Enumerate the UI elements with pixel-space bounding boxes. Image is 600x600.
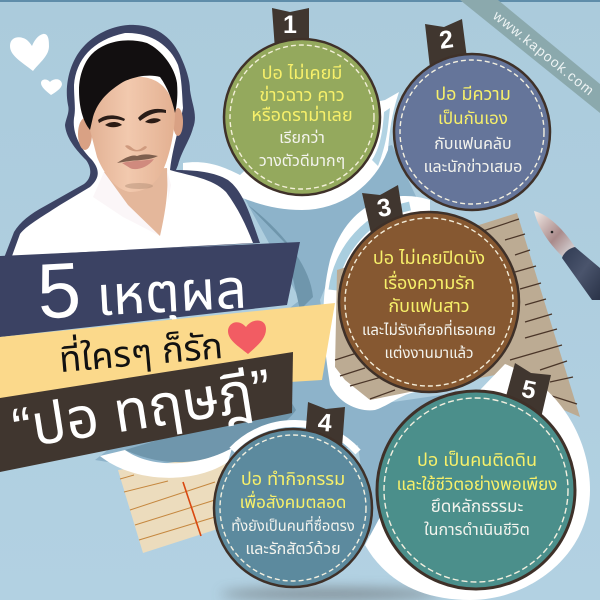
light gap beside circle 1 [372, 108, 390, 166]
tag 1: 1 [283, 11, 297, 39]
tag 5: 5 [519, 375, 539, 405]
circle 1: วางตัวดีมากๆ [259, 153, 345, 170]
circle 5: ปอ เป็นคนติดดิน [417, 450, 537, 470]
chin stubble [125, 183, 153, 189]
icon: red heart [228, 320, 266, 354]
circle 4: ทั้งยังเป็นคนที่ซื่อตรง [231, 516, 355, 535]
banner: yellow [0, 303, 335, 400]
icon: fountain pen [534, 211, 600, 300]
brows [98, 109, 166, 123]
banner: 5 reasons: 5 เหตุผล [35, 237, 249, 335]
circle 3: ปอ ไม่เคยปิดบัง [373, 248, 485, 268]
ground shadow [220, 588, 440, 600]
navy outline [4, 25, 260, 258]
circle 5 [377, 391, 575, 589]
circle 3: แต่งงานมาแล้ว [385, 344, 473, 362]
tag 1 [272, 8, 309, 50]
tag 3: 3 [375, 193, 393, 223]
heart: large [10, 34, 49, 71]
white ring around circle 5 [365, 364, 590, 600]
circle 2: และนักข่าวเสมอ [424, 158, 522, 176]
eyes [105, 118, 161, 127]
circle 1: ข่าวฉาว คาว [259, 85, 345, 105]
lips [122, 159, 154, 169]
light gap inside circle 3 ring [333, 206, 410, 290]
circle 3: และไม่รังเกียจที่เธอเคย [362, 319, 496, 339]
ears [78, 118, 92, 150]
banner: name: “ปอ ทฤษฎี” [8, 357, 276, 461]
circle 2: ปอ มีความ [435, 84, 511, 104]
white ring around circle 4 [232, 424, 358, 452]
circle 5: ยึดหลักธรรมะ [431, 497, 523, 516]
heart: small [41, 79, 62, 95]
tag 3 [362, 185, 404, 238]
circle 5: ในการดำเนินชีวิต [424, 522, 530, 539]
ribbon: website [460, 0, 600, 113]
tag 4 [305, 402, 345, 448]
circle 4: และรักสัตว์ด้วย [245, 541, 341, 558]
portrait [4, 25, 260, 258]
moustache [117, 154, 158, 163]
banner: yellow: ที่ใครๆ ก็รัก [57, 321, 224, 380]
circle 1: ปอ ไม่เคยมี [262, 63, 342, 83]
circle 5: และใช้ชีวิตอย่างพอเพียง [397, 474, 557, 494]
tag 5 [505, 363, 551, 418]
circle 3 [339, 212, 519, 392]
tag 2: 2 [437, 25, 455, 55]
circle 4: เพื่อสังคมตลอด [240, 490, 346, 512]
hair [79, 40, 177, 130]
darker band under name banner [125, 400, 296, 462]
nose shadow [125, 145, 147, 151]
circle 4: ปอ ทำกิจกรรม [241, 469, 345, 489]
circle 1 [224, 39, 380, 195]
tag 2 [425, 19, 467, 68]
face [90, 77, 175, 192]
paper: left note [118, 455, 230, 553]
white arc under title [100, 448, 232, 478]
white border and shirt [12, 33, 253, 256]
ribbon: website: www.kapook.com [489, 7, 598, 99]
circle 2: กับแฟนคลับ [434, 136, 512, 153]
darker shape behind banners [248, 205, 313, 310]
circle 3: กับแฟนสาว [388, 296, 470, 316]
circle 1: เรียกว่า [279, 129, 325, 147]
circle 2 [394, 54, 550, 210]
white ring around circle 3 [323, 196, 430, 410]
banner: 5 reasons [0, 237, 300, 337]
circle 4 [214, 429, 372, 587]
circle 1: หรือดราม่าเลย [251, 105, 353, 125]
white swoosh around circle 1 [183, 92, 399, 210]
circle 2: เป็นกันเอง [438, 109, 508, 128]
mid blue band behind circles [95, 145, 510, 560]
circle 3: เรื่องความรัก [383, 270, 475, 293]
neck [104, 168, 167, 236]
paper: right note [335, 213, 580, 417]
collar [93, 170, 171, 236]
tag 4: 4 [317, 408, 333, 438]
